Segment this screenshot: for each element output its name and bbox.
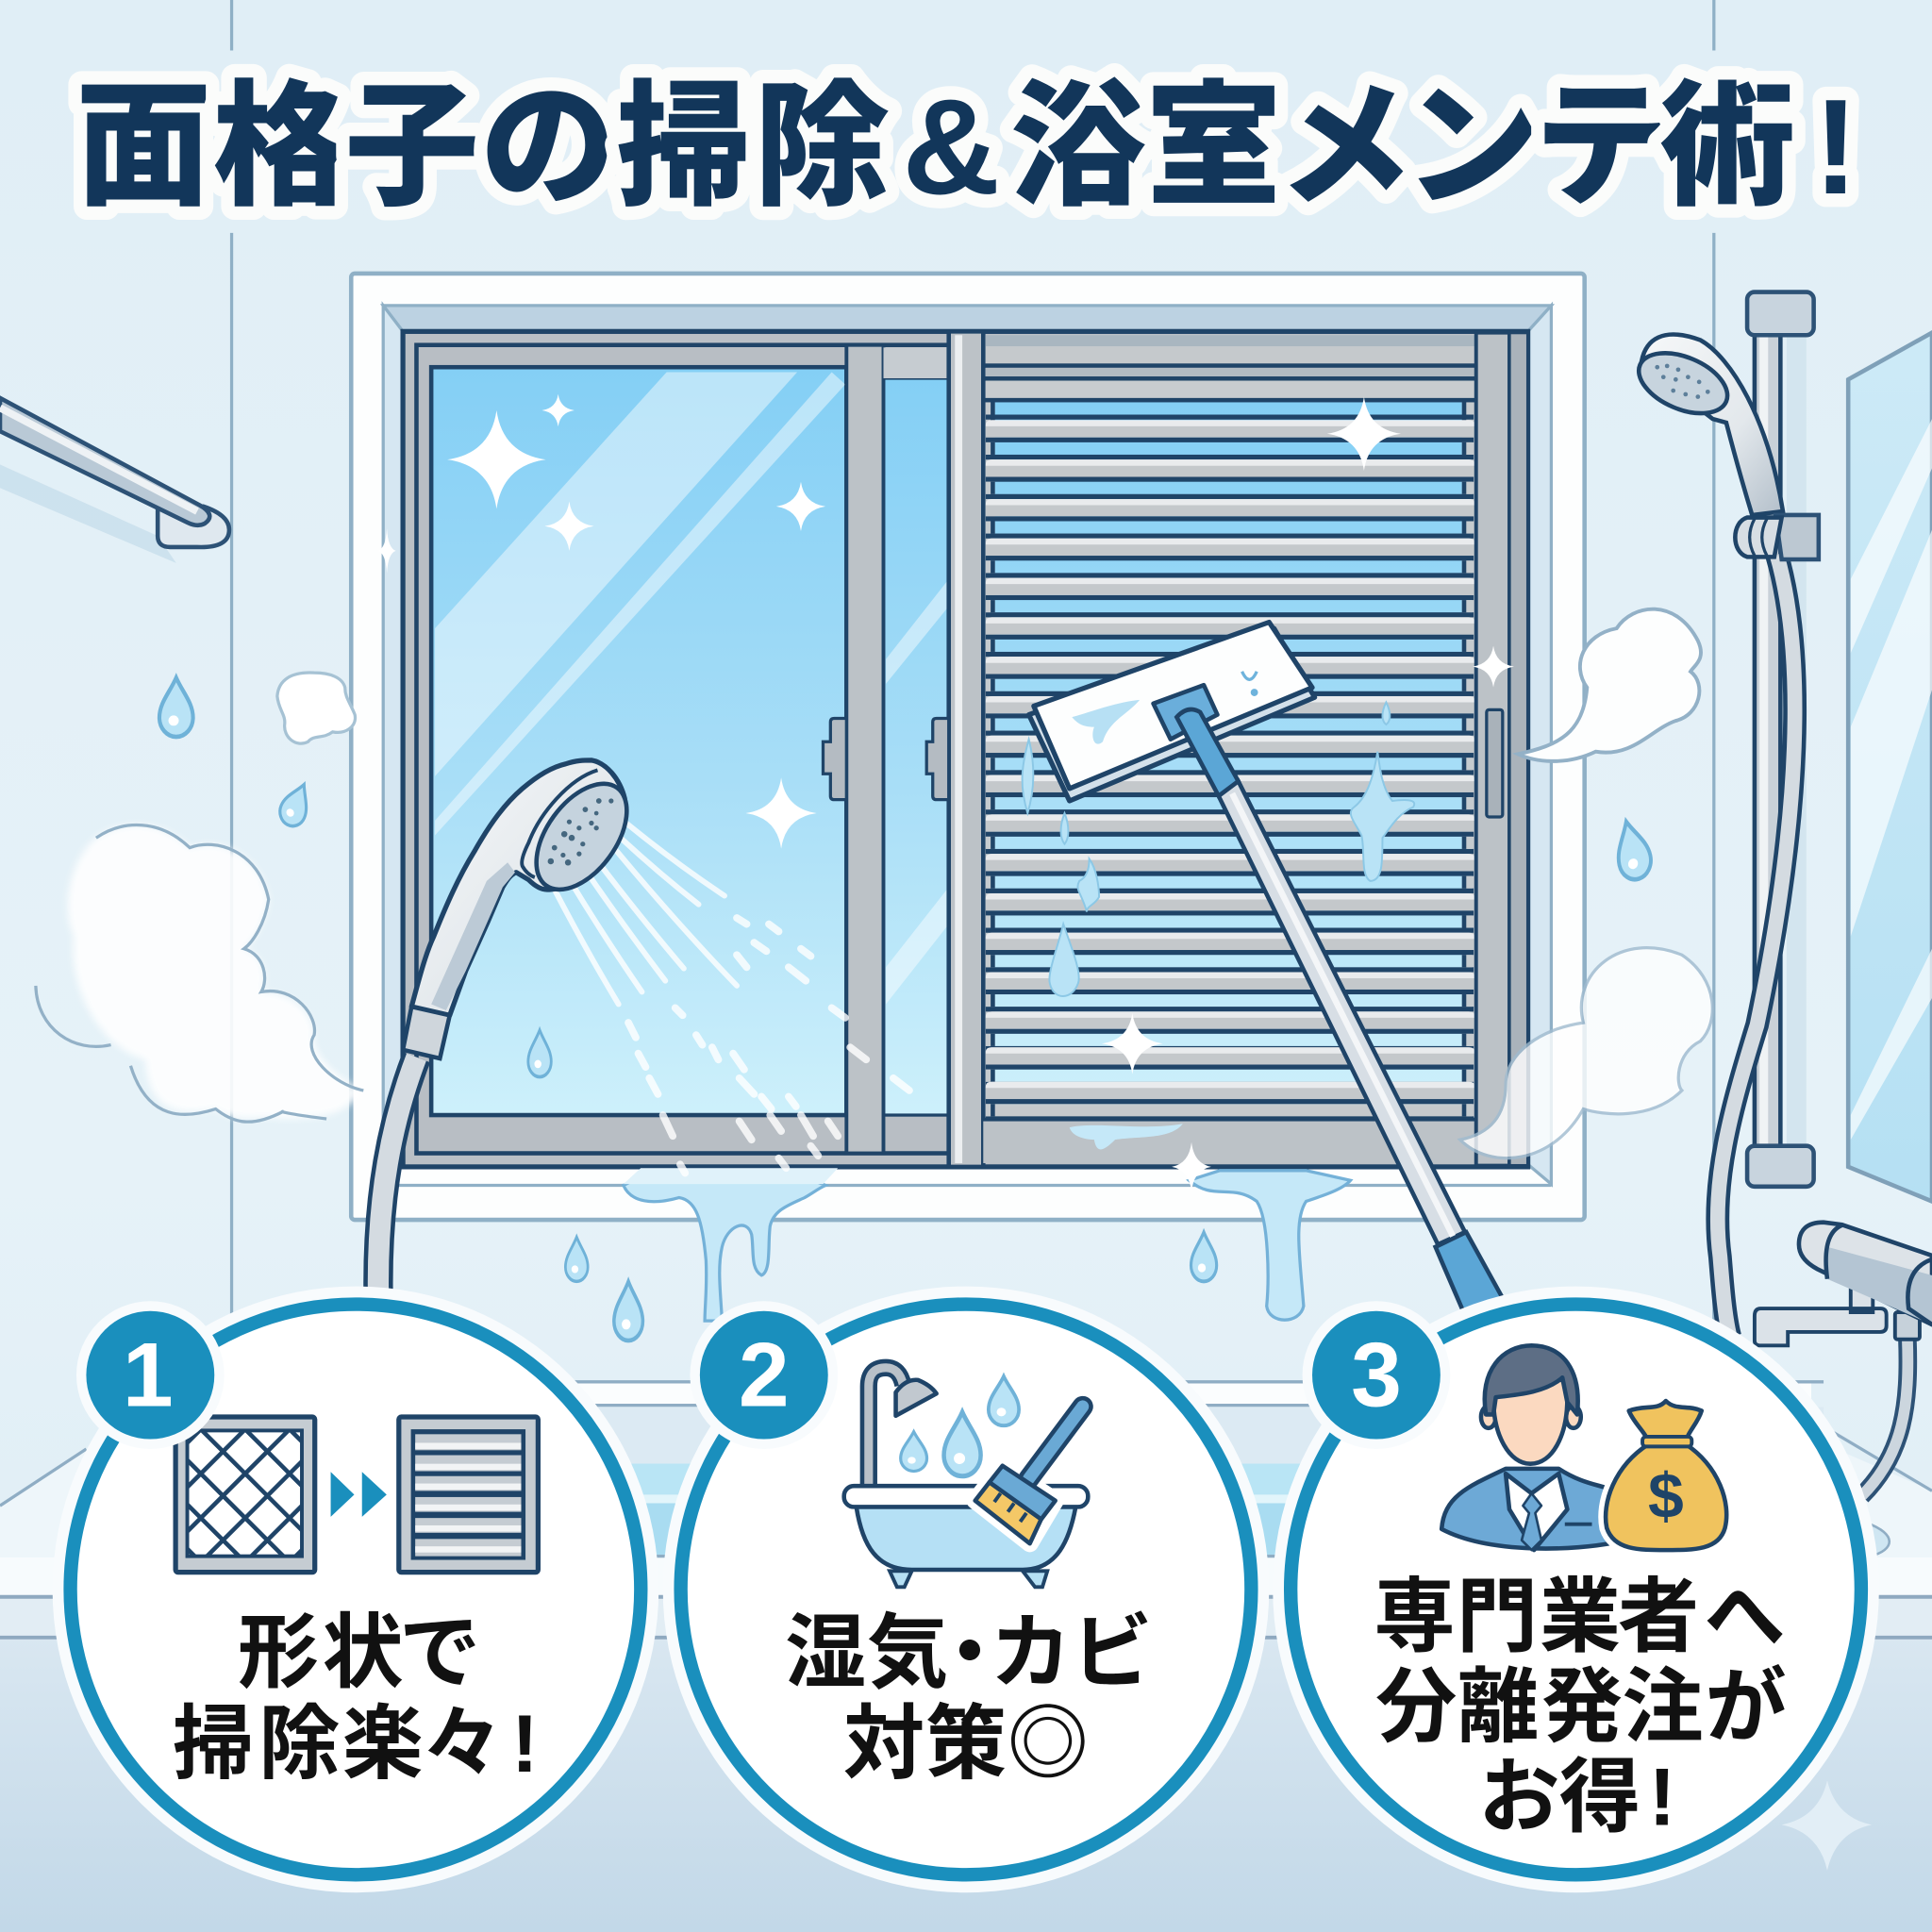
- icon: contractor: [1441, 1345, 1614, 1550]
- window reveal: [383, 306, 1551, 1185]
- bathtub band: [0, 1382, 1932, 1597]
- floor sparkle: [1782, 1780, 1872, 1871]
- glass pane left: [431, 367, 846, 1115]
- louver grille: [983, 335, 1476, 1163]
- handle left: [411, 760, 625, 1015]
- collar: [403, 1007, 450, 1058]
- steam cloud left: [36, 825, 363, 1122]
- shower spray: [553, 809, 909, 1173]
- mop connector: [1154, 685, 1217, 740]
- shower rail: [1747, 292, 1814, 1187]
- icon: money bag: $: [1648, 1461, 1684, 1532]
- icon: arrows: [331, 1472, 387, 1517]
- mop pad: [1029, 628, 1315, 801]
- body text 2: 対策◎: [843, 1699, 1089, 1790]
- steam cloud top right: [1518, 609, 1701, 761]
- mop pole: [1219, 781, 1465, 1244]
- faucet hose: [1862, 1338, 1907, 1496]
- nozzle: [518, 768, 645, 906]
- circle 3: [1273, 1287, 1879, 1892]
- steam cloud bottom right: [1460, 948, 1712, 1158]
- window sill water: [624, 1124, 1351, 1321]
- shower head left: [378, 760, 645, 1293]
- steam cloud small: [277, 673, 355, 743]
- hose left: [378, 1058, 416, 1293]
- sill water highlight: [624, 1168, 838, 1184]
- icon: bathtub with brush: [844, 1368, 1088, 1587]
- towel bar: [0, 398, 229, 563]
- badge 3: 3: [1351, 1324, 1402, 1425]
- water drops on wall: [159, 677, 1655, 1341]
- glass pane right: [883, 378, 949, 1115]
- panel: window: [351, 274, 1585, 1321]
- badge 1: 1: [123, 1324, 174, 1425]
- lock right: [926, 718, 949, 800]
- heading text 1: 形状で: [238, 1608, 480, 1699]
- heading text 3: 専門業者へ: [1374, 1573, 1786, 1663]
- sparkles: [378, 394, 1514, 1191]
- badge 3: [1303, 1301, 1450, 1449]
- shower hose right: [1718, 555, 1795, 1337]
- sash stile: [846, 345, 883, 1154]
- right handle: [1487, 709, 1503, 817]
- icon: money bag: [1606, 1401, 1726, 1550]
- body text 1: 掃除楽々!: [173, 1699, 539, 1790]
- faucet spout: [1755, 1288, 1887, 1345]
- faucet body: [1799, 1223, 1932, 1324]
- right stile: [1476, 333, 1528, 1166]
- mop stain: [1072, 700, 1140, 744]
- title: 面格子の掃除&浴室メンテ術!: [75, 72, 1858, 223]
- window sash frame: [403, 331, 1528, 1167]
- panel: point 2: [663, 1287, 1269, 1892]
- rim: [522, 770, 597, 877]
- faucet fitting: [1895, 1312, 1920, 1340]
- thermostat faucet: [1755, 1223, 1932, 1496]
- window outer frame: [351, 274, 1585, 1220]
- handle shadow: [431, 862, 515, 1010]
- circle 2: [663, 1287, 1269, 1892]
- icon: louver grille: [399, 1417, 538, 1573]
- center stile: [949, 331, 983, 1167]
- louver water droplets: [1023, 702, 1414, 996]
- circle 1: [53, 1287, 658, 1892]
- heading text 2: 湿気・カビ: [785, 1608, 1153, 1699]
- rail clamp: [1735, 515, 1819, 559]
- wall tile lines: [232, 0, 1714, 1356]
- emphasis text 3: お得!: [1478, 1752, 1675, 1842]
- panel: point 1: [53, 1287, 658, 1892]
- badge 2: [690, 1301, 838, 1449]
- badge 2: 2: [739, 1324, 790, 1425]
- floor: [0, 1597, 1932, 1932]
- lock left: [823, 718, 846, 800]
- body text 3: 分離発注が: [1375, 1662, 1787, 1753]
- mop: [1029, 623, 1506, 1319]
- badge 1: [76, 1301, 225, 1449]
- mirror: [1848, 333, 1932, 1201]
- shower head right: [1630, 335, 1783, 515]
- icon: lattice grille: [174, 1414, 317, 1575]
- panel: point 3: [1273, 1287, 1879, 1892]
